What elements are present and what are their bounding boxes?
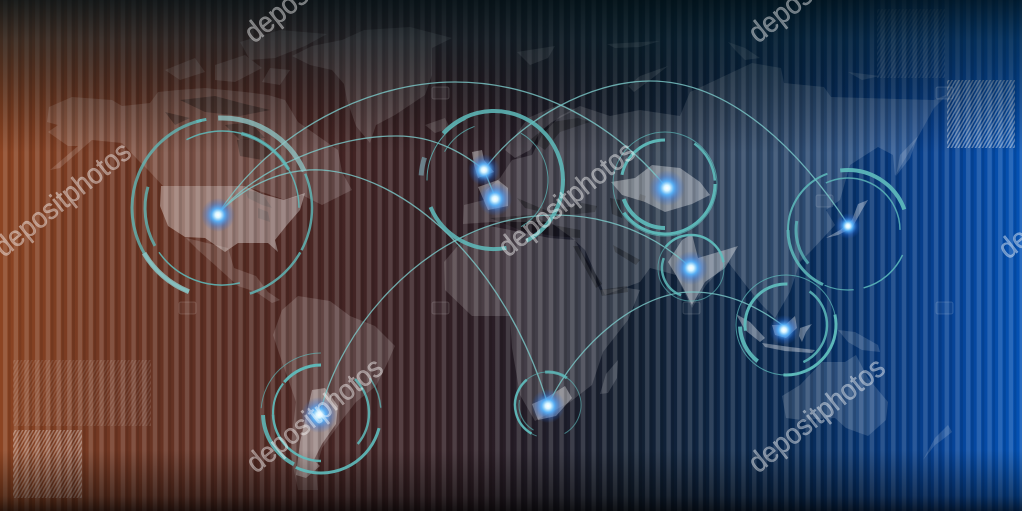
arc South Africa to Indonesia <box>548 292 785 405</box>
Eurasia <box>463 63 948 318</box>
Novaya Zemlya strip <box>628 66 668 92</box>
ring: India <box>645 222 737 314</box>
Borneo <box>772 316 797 338</box>
depositphotos watermarks: depositphotos <box>240 352 389 479</box>
Australia <box>782 355 888 436</box>
ring: South Africa <box>503 360 593 450</box>
ring: Indonesia <box>721 260 851 390</box>
ring: USA <box>99 85 345 331</box>
Iceland <box>425 118 450 133</box>
Sumatra <box>736 314 765 342</box>
Java and Sunda islands <box>762 343 815 353</box>
arc USA to UK <box>218 136 484 214</box>
New Zealand <box>923 425 952 460</box>
Red Sea <box>573 246 602 288</box>
hatch square bottom left faint <box>13 360 151 426</box>
glow France <box>478 182 512 216</box>
glow Argentina <box>301 397 337 433</box>
glow UK <box>468 154 500 186</box>
glow South Africa <box>531 389 565 423</box>
Sulawesi <box>799 324 812 342</box>
ring: Japan <box>768 150 928 310</box>
Arctic channels in Canada <box>165 96 270 140</box>
highlighted countries <box>160 150 868 478</box>
Japan <box>826 200 868 238</box>
New Guinea <box>838 330 880 352</box>
depositphotos watermarks: depositphotos <box>742 352 891 479</box>
Scandinavia <box>505 104 575 158</box>
Persian Gulf <box>613 245 640 265</box>
arc France to UK <box>484 170 496 199</box>
connection arcs <box>218 81 849 413</box>
France <box>478 180 508 210</box>
UK <box>472 150 494 178</box>
Madagascar <box>600 360 618 394</box>
glow India <box>674 251 708 285</box>
glow USA <box>201 198 235 232</box>
arc USA to South Africa <box>218 170 548 405</box>
Hudson Bay lobe <box>237 138 274 160</box>
arc Argentina to India <box>320 215 691 413</box>
Greenland <box>292 27 452 143</box>
glow Kazakhstan <box>649 170 685 206</box>
depositphotos watermarks: depositphotos <box>492 136 641 263</box>
Arctic islands <box>517 41 880 80</box>
Kazakhstan <box>611 165 710 212</box>
Mediterranean <box>490 215 580 238</box>
North America: Alaska and Canada <box>47 88 352 205</box>
ring: Argentina <box>237 329 405 497</box>
South Africa <box>532 386 572 420</box>
glow Japan <box>835 213 861 239</box>
Great Lakes <box>245 190 272 222</box>
ring: Europe <box>396 82 592 278</box>
Baltic Sea <box>530 118 590 150</box>
arc UK to Japan <box>484 81 849 226</box>
target rings <box>99 82 928 497</box>
ring: Kazakhstan <box>595 114 735 254</box>
arc USA to Kazakhstan <box>218 82 666 214</box>
South America <box>273 296 395 490</box>
Black Sea <box>517 198 597 216</box>
Arctic islands of Canada <box>165 30 327 85</box>
hatch square top right faint <box>877 9 945 78</box>
hatch square bottom left bright <box>13 430 82 498</box>
location glows <box>201 154 861 433</box>
hatch square top right bright <box>947 80 1015 148</box>
Mexico and Central America <box>186 238 280 303</box>
inland seas and bays <box>165 96 646 296</box>
USA <box>160 186 305 252</box>
India <box>668 234 738 305</box>
glow Indonesia <box>769 315 799 345</box>
Sakhalin and Kamchatka tip <box>896 136 918 176</box>
watermark camera icons <box>179 87 953 314</box>
Argentina <box>296 388 338 478</box>
Caspian and Aral <box>610 194 646 218</box>
Africa <box>444 226 640 421</box>
Gulf of Aden <box>600 286 628 296</box>
